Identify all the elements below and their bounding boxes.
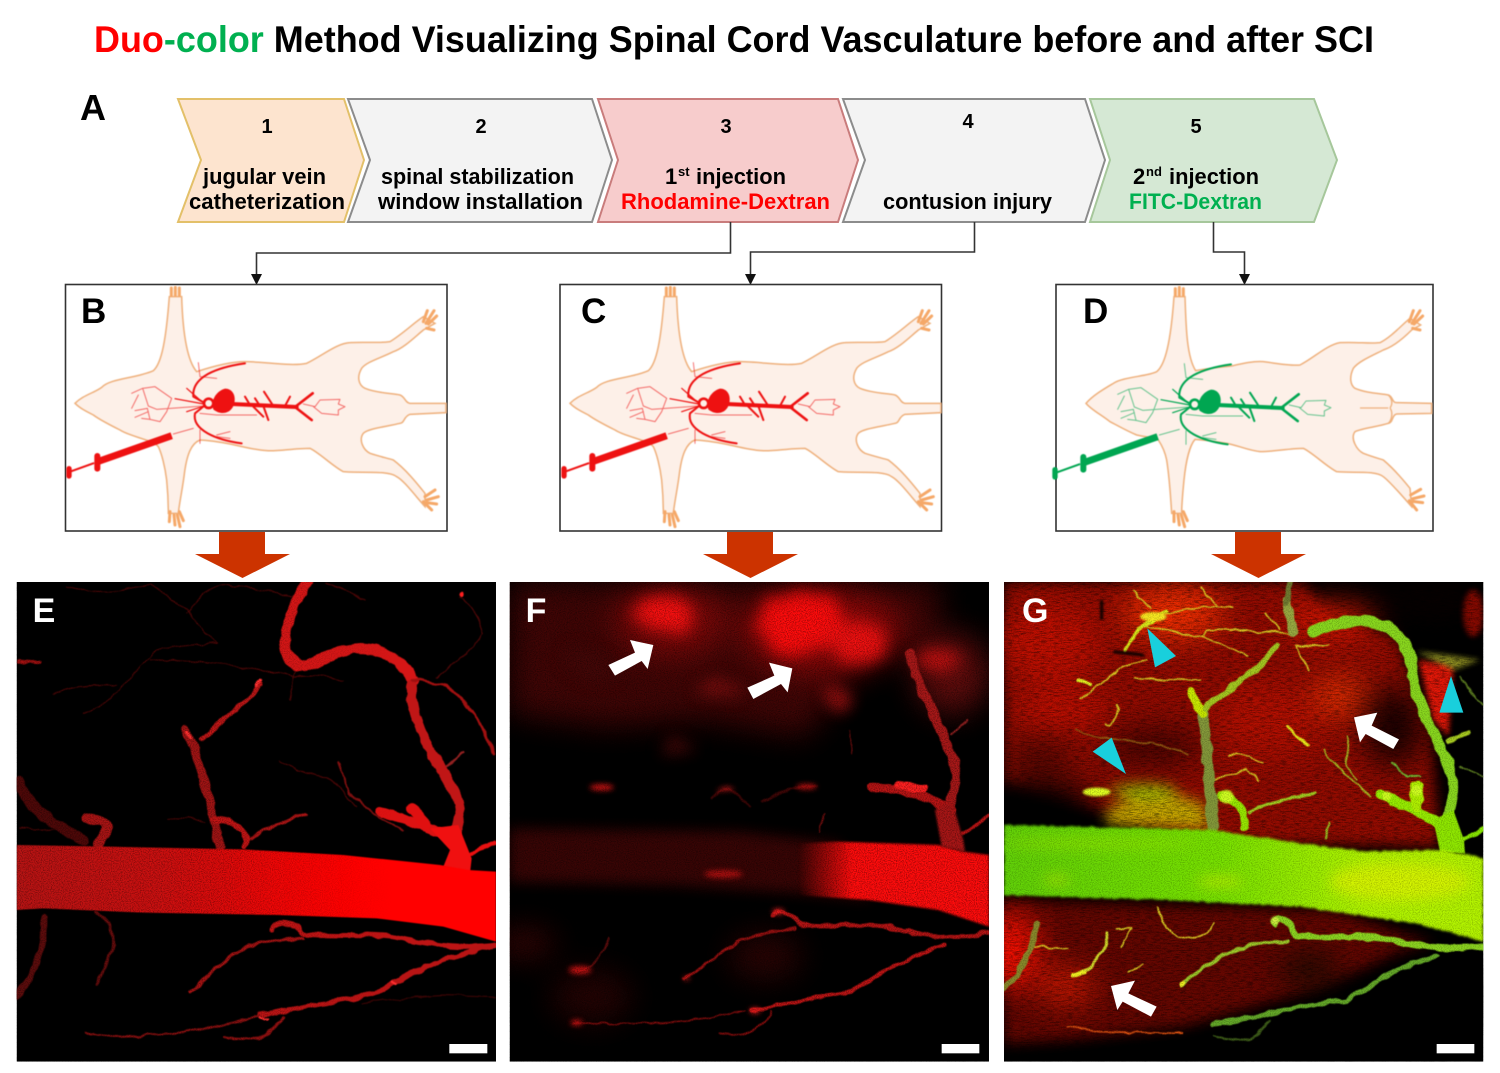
step 3: 1st injection Rhodamine-Dextran: 3: [720, 116, 732, 138]
panel E: micrograph before injury: [17, 582, 496, 1062]
mouse illustration C: [564, 287, 941, 527]
scale bar G: [1437, 1044, 1474, 1053]
cyan arrowhead 1: [1147, 628, 1176, 667]
flow diagram: steps 1 to 5: [178, 99, 1337, 222]
panel B: mouse with red injection: [66, 284, 447, 531]
connector arrow: step 3 to panel B: [251, 222, 730, 285]
title: Duo-color Method Visualizing Spinal Cord Vasculature before and after SCI: [94, 19, 1374, 60]
extravasation blobs: [568, 595, 962, 753]
letter E: E: [33, 592, 55, 630]
step 3: 1st injection Rhodamine-Dextran: st: [678, 164, 690, 179]
panel F: micrograph after injury, rhodamine channel: [495, 582, 989, 1062]
streak texture on background: [1004, 582, 1483, 1062]
panel label A: A: [80, 87, 106, 128]
letter G: G: [1022, 592, 1048, 630]
panel D: mouse with green injection: [1055, 284, 1433, 531]
step 4: contusion injury: contusion injury: [883, 189, 1053, 214]
mouse illustration B: [69, 287, 446, 527]
connector arrow: step 5 to panel D: [1214, 222, 1250, 285]
scale bar F: [942, 1044, 979, 1053]
step 3: 1st injection Rhodamine-Dextran: Rhodamine-Dextran: [621, 189, 830, 214]
step 1: jugular vein catheterization: catheterization: [189, 189, 345, 214]
step 5: 2nd injection FITC-Dextran: 5: [1190, 116, 1202, 138]
green-yellow vessels: [1080, 583, 1483, 840]
paws D: [1174, 287, 1424, 527]
speckle: [510, 582, 989, 1062]
step 5: 2nd injection FITC-Dextran: injection: [1169, 164, 1259, 189]
step 2: spinal stabilization window installation: window installation: [377, 189, 583, 214]
step 1: jugular vein catheterization: jugular vein: [202, 164, 326, 189]
white arrow F1: [608, 640, 653, 676]
lower green vessels: [1005, 920, 1483, 1041]
block arrow: B to E: [195, 532, 290, 578]
bright spots: [569, 784, 817, 1025]
step 2: spinal stabilization window installation: 2: [475, 116, 487, 138]
step 2: spinal stabilization window installation: [348, 99, 612, 222]
step 4: contusion injury: 4: [962, 111, 974, 133]
white arrow G1: [1354, 713, 1399, 749]
step 5: 2nd injection FITC-Dextran: nd: [1146, 164, 1162, 179]
step 1: jugular vein catheterization: [178, 99, 364, 222]
step 5: 2nd injection FITC-Dextran: FITC-Dextran: [1129, 189, 1262, 214]
mouse illustration D: [1055, 287, 1432, 527]
scale bar E: [449, 1044, 487, 1053]
step 2: spinal stabilization window installation: spinal stabilization: [381, 164, 574, 189]
speckle: [16, 582, 376, 1062]
block arrow: C to F: [703, 532, 798, 578]
letter D: D: [1083, 292, 1108, 331]
fine faint capillaries: [20, 583, 496, 1003]
speckle: [1004, 582, 1483, 1062]
step 5: 2nd injection FITC-Dextran: [1090, 99, 1337, 222]
cyan arrowhead 2: [1439, 676, 1463, 713]
panel G: merged micrograph: [980, 580, 1497, 1062]
vessels: [575, 653, 989, 1035]
fine capillaries: [1033, 588, 1483, 1033]
diffuse red haze: [495, 582, 988, 1023]
lower vessels: [17, 592, 495, 1040]
step 4: contusion injury: [843, 99, 1105, 222]
step 5: 2nd injection FITC-Dextran: 2: [1133, 164, 1145, 189]
panel C: mouse with red injection: [560, 284, 942, 531]
main vessel, bright right part: [798, 842, 989, 927]
connector arrow: step 4 to panel C: [745, 222, 974, 285]
bright spots: [1083, 612, 1422, 925]
cyan arrowhead 3: [1093, 738, 1126, 774]
main vessel, dim diffuse part: [510, 828, 872, 900]
letter B: B: [81, 292, 106, 331]
step 3: 1st injection Rhodamine-Dextran: 1: [665, 164, 677, 189]
block arrow: D to G: [1211, 532, 1306, 578]
white arrow G2: [1111, 981, 1157, 1017]
red background: [1004, 582, 1440, 1043]
main spinal vessel: [1004, 825, 1483, 942]
upper branching vessel: [284, 583, 496, 855]
step 3: 1st injection Rhodamine-Dextran: injection: [696, 164, 786, 189]
letter C: C: [581, 292, 606, 331]
step 3: 1st injection Rhodamine-Dextran: [598, 99, 858, 222]
central vessels: [18, 662, 305, 847]
white arrow F2: [747, 663, 792, 699]
dark crease top left: [1102, 600, 1143, 655]
step 1: jugular vein catheterization: 1: [261, 116, 273, 138]
main spinal vessel: [17, 845, 496, 942]
letter F: F: [526, 592, 546, 630]
